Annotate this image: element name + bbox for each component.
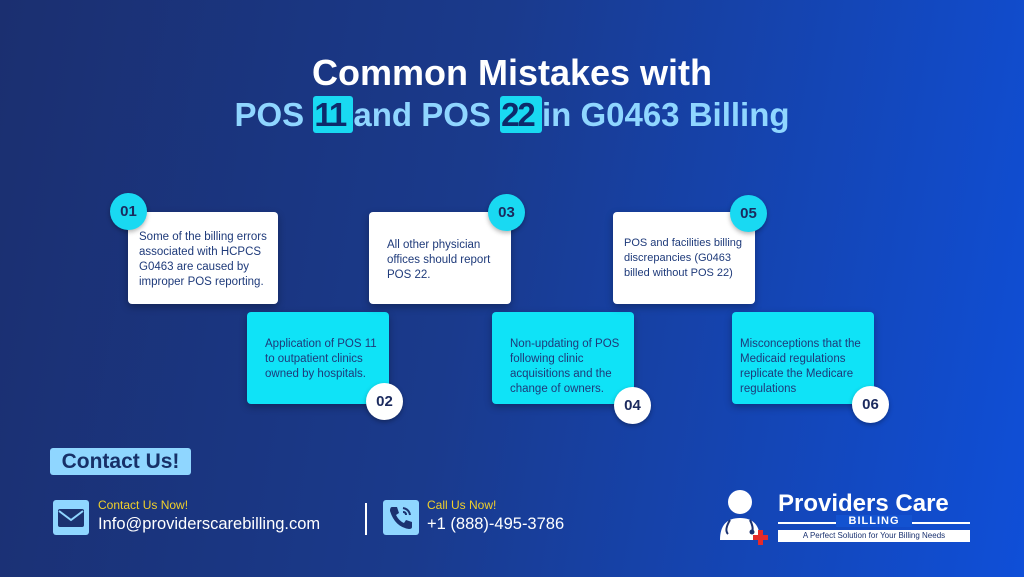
email block: Contact Us Now!	[98, 498, 188, 512]
card 03: All other physician offices should report POS 22.	[387, 239, 490, 281]
logo: A Perfect Solution for Your Billing Needs	[803, 531, 945, 540]
badge 03	[488, 194, 525, 231]
logo: BILLING	[848, 515, 900, 527]
card 04	[492, 312, 634, 404]
icon: phone	[383, 500, 419, 535]
icon: mail	[53, 500, 89, 535]
phone block	[383, 498, 564, 535]
divider	[365, 503, 367, 535]
card 03	[369, 212, 511, 304]
email block	[53, 498, 320, 535]
logo	[720, 490, 970, 545]
card 01: Some of the billing errors associated with HCPCS G0463 are caused by improper POS reporting.	[139, 231, 267, 288]
card 02: Application of POS 11 to outpatient clinics owned by hospitals.	[265, 338, 377, 380]
badge 01: 01	[120, 203, 137, 220]
card 06	[732, 312, 874, 404]
card 02	[247, 312, 389, 404]
badge 02	[366, 383, 403, 420]
card 05: POS and facilities billing discrepancies (G0463 billed without POS 22)	[624, 237, 742, 279]
phone block: +1 (888)-495-3786	[427, 515, 564, 533]
email block: Info@providerscarebilling.com	[98, 515, 320, 533]
badge 04: 04	[624, 397, 641, 414]
icon: doctor	[720, 490, 768, 545]
card 05	[613, 212, 755, 304]
contact heading: Contact Us!	[62, 450, 179, 473]
badge 06: 06	[862, 396, 879, 413]
title: Common Mistakes with	[312, 52, 712, 93]
badge 04	[614, 387, 651, 424]
badge 05: 05	[740, 205, 757, 222]
title	[234, 52, 790, 133]
badge 01	[110, 193, 147, 230]
title: POS 11 and POS 22 in G0463 Billing	[234, 96, 790, 133]
logo: Providers Care	[778, 490, 949, 517]
phone block: Call Us Now!	[427, 498, 496, 512]
card 06: Misconceptions that the Medicaid regulations replicate the Medicare regulations	[740, 338, 861, 395]
card 01	[128, 212, 278, 304]
badge 02: 02	[376, 393, 393, 410]
badge 06	[852, 386, 889, 423]
badge 03: 03	[498, 204, 515, 221]
badge 05	[730, 195, 767, 232]
card 04: Non-updating of POS following clinic acquisitions and the change of owners.	[510, 338, 619, 395]
